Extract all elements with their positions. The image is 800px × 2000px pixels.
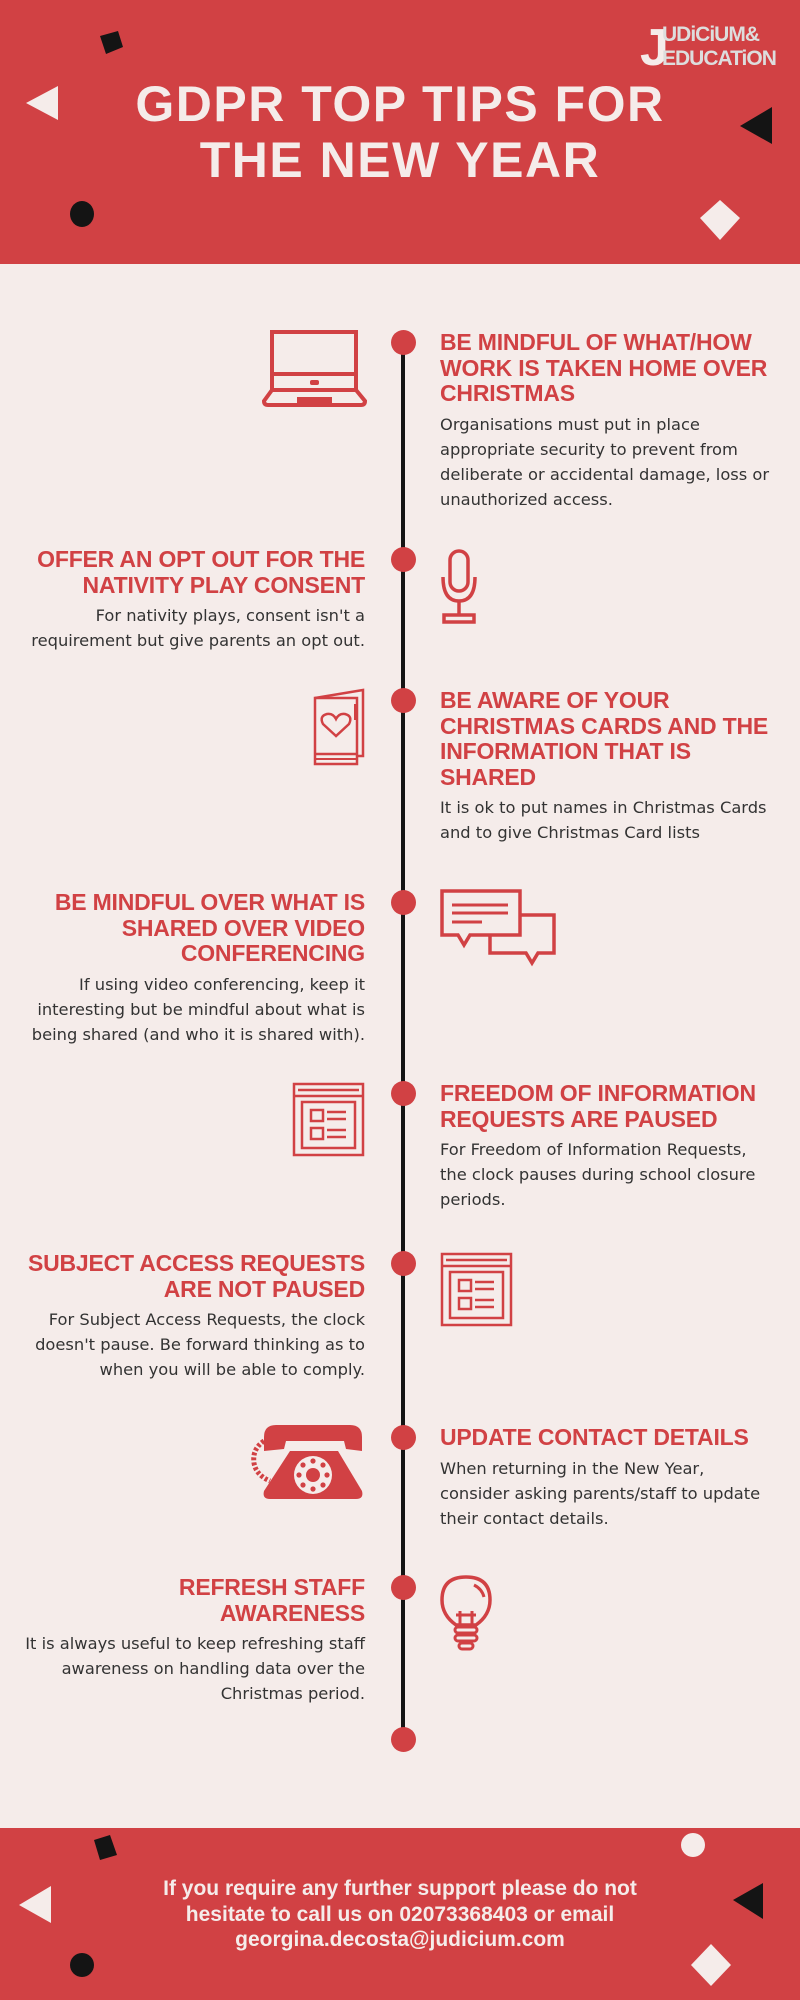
logo xyxy=(640,19,776,77)
item 5: For Freedom of Information Requests, xyxy=(440,1140,747,1159)
item 6: ARE NOT PAUSED xyxy=(164,1276,365,1302)
item 1: Organisations must put in place xyxy=(440,414,700,434)
item 2: requirement but give parents an opt out. xyxy=(31,631,365,650)
item 1: BE MINDFUL OF WHAT/HOW xyxy=(440,329,752,355)
footer band xyxy=(0,1828,800,2000)
item 8: It is always useful to keep refreshing staff xyxy=(25,1634,365,1653)
item 6: SUBJECT ACCESS REQUESTS xyxy=(28,1250,365,1276)
item 1: appropriate security to prevent from xyxy=(440,440,738,458)
icon: document 2 xyxy=(440,1252,512,1326)
item 4: If using video conferencing, keep it xyxy=(79,974,365,994)
title: THE NEW YEAR xyxy=(200,132,600,188)
item 5: periods. xyxy=(440,1190,506,1209)
icon: telephone xyxy=(251,1425,362,1499)
logo: J xyxy=(640,19,669,77)
item 5: FREEDOM OF INFORMATION xyxy=(440,1080,756,1106)
item 8: Christmas period. xyxy=(221,1684,365,1703)
item 3: and to give Christmas Card lists xyxy=(440,823,700,842)
icon: document xyxy=(292,1082,364,1156)
icon: chat bubbles xyxy=(440,889,556,966)
item 4: CONFERENCING xyxy=(181,940,365,966)
title xyxy=(135,76,665,188)
item 5: the clock pauses during school closure xyxy=(440,1165,755,1184)
item 1: CHRISTMAS xyxy=(440,380,575,406)
item 5: REQUESTS ARE PAUSED xyxy=(440,1106,717,1132)
item 7: their contact details. xyxy=(440,1508,609,1528)
item 8: awareness on handling data over the xyxy=(62,1659,365,1678)
item 8: REFRESH STAFF xyxy=(179,1574,365,1600)
item 1 xyxy=(440,329,770,508)
item 3: SHARED xyxy=(440,764,536,790)
item 3: INFORMATION THAT IS xyxy=(440,738,691,764)
icon: microphone xyxy=(441,549,477,624)
item 4 xyxy=(32,889,365,1044)
item 7 xyxy=(440,1424,760,1528)
item 8: AWARENESS xyxy=(220,1600,365,1626)
item 4: SHARED OVER VIDEO xyxy=(122,914,365,940)
item 2: For nativity plays, consent isn't a xyxy=(96,606,365,625)
item 6: when you will be able to comply. xyxy=(100,1360,365,1379)
logo: EDUCATiON xyxy=(662,47,776,70)
title: GDPR TOP TIPS FOR xyxy=(135,76,665,132)
decorative shapes footer xyxy=(19,1833,763,1986)
item 4: interesting but be mindful about what is xyxy=(37,1000,365,1018)
item 1: WORK IS TAKEN HOME OVER xyxy=(440,354,767,380)
item 6: For Subject Access Requests, the clock xyxy=(49,1310,365,1329)
item 4: BE MINDFUL OVER WHAT IS xyxy=(55,889,365,915)
logo: UDiCiUM& xyxy=(662,23,759,46)
footer text: If you require any further support please do not xyxy=(163,1877,637,1900)
item 4: being shared (and who it is shared with). xyxy=(32,1024,365,1044)
item 6 xyxy=(28,1250,365,1379)
item 2: NATIVITY PLAY CONSENT xyxy=(82,572,365,598)
footer text: hesitate to call us on 02073368403 or email xyxy=(186,1902,614,1926)
item 1: deliberate or accidental damage, loss or xyxy=(440,464,769,484)
item 8 xyxy=(25,1574,366,1703)
item 3: CHRISTMAS CARDS AND THE xyxy=(440,712,768,738)
item 3 xyxy=(440,687,768,842)
icon: laptop xyxy=(262,330,367,407)
header band xyxy=(0,0,800,264)
item 6: doesn't pause. Be forward thinking as to xyxy=(35,1335,365,1354)
footer text xyxy=(163,1877,637,1951)
item 2 xyxy=(31,546,365,650)
item 2: OFFER AN OPT OUT FOR THE xyxy=(37,546,365,572)
timeline line xyxy=(401,342,405,1739)
item 7: consider asking parents/staff to update xyxy=(440,1484,760,1502)
icon: light bulb xyxy=(440,1575,492,1650)
item 3: BE AWARE OF YOUR xyxy=(440,687,669,713)
icon: card xyxy=(314,688,364,766)
item 3: It is ok to put names in Christmas Cards xyxy=(440,798,767,817)
item 5 xyxy=(440,1080,756,1209)
item 1: unauthorized access. xyxy=(440,490,613,508)
footer text: georgina.decosta@judicium.com xyxy=(235,1928,565,1951)
decorative shapes header xyxy=(26,31,772,240)
item 7: When returning in the New Year, xyxy=(440,1458,704,1478)
item 7: UPDATE CONTACT DETAILS xyxy=(440,1424,749,1450)
